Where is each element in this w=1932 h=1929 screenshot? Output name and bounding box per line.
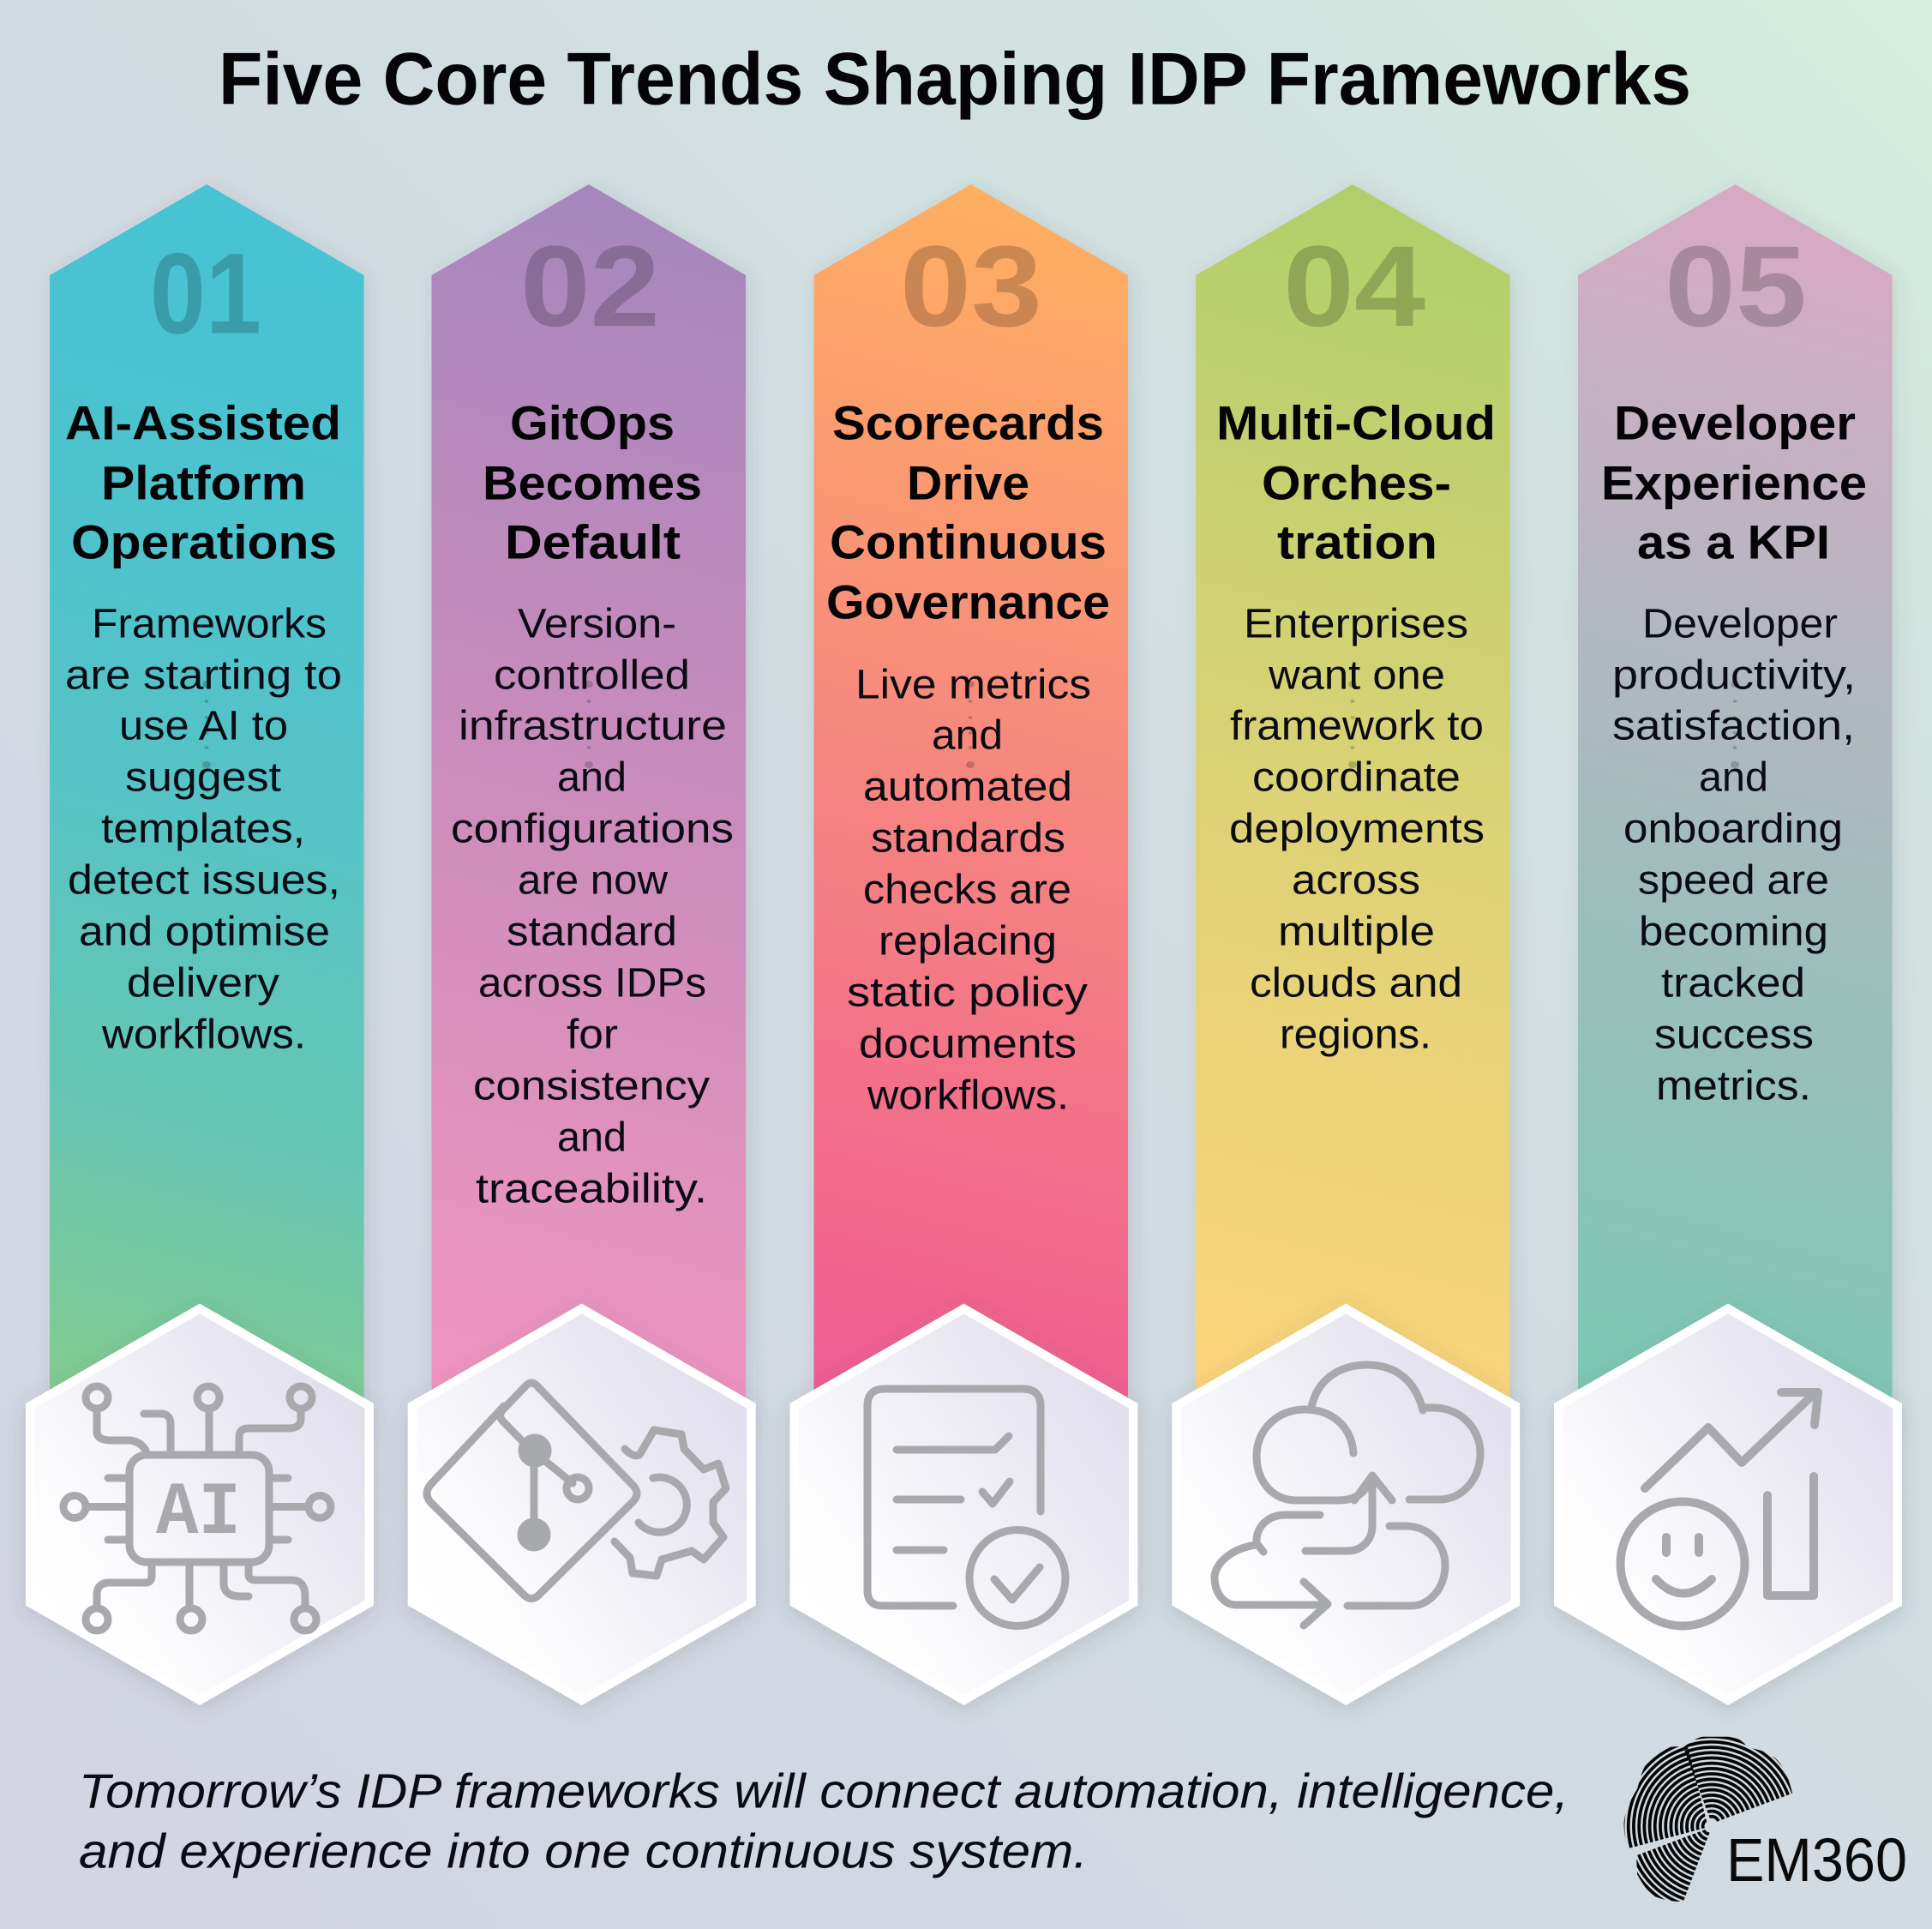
- body text 04: [1229, 602, 1485, 1058]
- body text 05: becoming: [1639, 909, 1828, 955]
- body text 05: success: [1654, 1012, 1814, 1058]
- hexagon badge 03: [790, 1303, 1138, 1705]
- icon: AI chip: AI: [156, 1472, 241, 1556]
- icon: scorecard checklist: [867, 1389, 1065, 1626]
- body text 01: delivery: [127, 960, 279, 1007]
- heading 04: tration: [1277, 514, 1437, 569]
- body text 01: Frameworks: [92, 602, 327, 646]
- column shape 04: [1196, 184, 1510, 1432]
- connector dots 03: [966, 681, 975, 768]
- body text 01: and optimise: [79, 909, 330, 955]
- body text 05: [1612, 602, 1856, 1109]
- connector dots 05: [1731, 681, 1739, 768]
- panel: 01 AI-Assisted Platform Operations: [50, 184, 363, 1432]
- body text 01: suggest: [125, 754, 281, 801]
- heading 02: Default: [505, 514, 681, 569]
- body text 02: Version-: [518, 602, 676, 646]
- body text 05: and: [1699, 754, 1768, 801]
- body text 01: workflows.: [101, 1012, 306, 1058]
- body text 04: deployments: [1229, 806, 1485, 852]
- body text 03: static policy: [847, 971, 1088, 1015]
- column shape 01: [50, 184, 363, 1432]
- body text 02: infrastructure: [459, 703, 727, 749]
- body text 04: framework to: [1230, 703, 1484, 749]
- heading 02: GitOps: [510, 396, 675, 449]
- heading 03: Scorecards: [832, 396, 1104, 449]
- heading 03: Continuous: [830, 514, 1107, 569]
- body text 01: are starting to: [65, 653, 342, 698]
- heading 05: Developer: [1614, 396, 1856, 449]
- heading 03: [826, 396, 1110, 629]
- body text 04: clouds and: [1250, 960, 1462, 1007]
- body text 02: standard: [507, 909, 677, 955]
- body text 03: [847, 662, 1091, 1118]
- heading 05: Experience: [1601, 456, 1867, 509]
- number 05: 05: [1665, 223, 1807, 351]
- body text 01: [65, 602, 342, 1058]
- body text 03: and: [932, 713, 1003, 758]
- body text 05: onboarding: [1623, 806, 1843, 852]
- body text 04: regions.: [1280, 1012, 1431, 1058]
- body text 03: replacing: [879, 919, 1057, 964]
- panel: 05 Developer Experience as a KPI: [1578, 184, 1893, 1432]
- body text 05: speed are: [1638, 857, 1829, 904]
- heading 04: Multi-Cloud: [1216, 396, 1496, 449]
- body text 03: checks are: [863, 868, 1071, 912]
- body text 01: use AI to: [119, 703, 288, 749]
- hexagon badge 04: [1172, 1303, 1520, 1705]
- body text 04: Enterprises: [1244, 602, 1468, 646]
- logo wordmark: EM360: [1726, 1827, 1907, 1895]
- heading 02: [483, 396, 702, 569]
- logo: EM360: [1623, 1737, 1905, 1902]
- body text 02: and: [557, 754, 627, 801]
- hexagon badge 05: [1554, 1303, 1902, 1705]
- column shape 02: [432, 184, 746, 1432]
- body text 02: and: [557, 1115, 627, 1161]
- body text 05: metrics.: [1656, 1063, 1811, 1109]
- icon: multi-cloud arrows: [1215, 1365, 1480, 1626]
- heading 04: [1216, 396, 1496, 569]
- heading 01: AI-Assisted: [65, 396, 341, 449]
- body text 02: across IDPs: [478, 960, 706, 1007]
- body text 03: documents: [859, 1022, 1077, 1067]
- body text 02: [451, 602, 734, 1212]
- title: Five Core Trends Shaping IDP Frameworks: [219, 38, 1691, 120]
- body text 03: Live metrics: [855, 662, 1091, 708]
- number 04: 04: [1283, 223, 1425, 351]
- panel: 03 Scorecards Drive Continuous Governance: [814, 184, 1128, 1432]
- icon: smiley with growth chart: [1620, 1392, 1818, 1626]
- body text 04: multiple: [1278, 909, 1435, 955]
- heading 04: Orches-: [1262, 456, 1451, 509]
- column shape 05: [1578, 184, 1893, 1432]
- connector dots 04: [1348, 681, 1357, 768]
- body text 02: are now: [518, 857, 668, 904]
- closing statement: and experience into one continuous system.: [79, 1824, 1088, 1879]
- closing statement: [79, 1764, 1569, 1879]
- closing statement: Tomorrow’s IDP frameworks will connect automation, intelligence,: [79, 1764, 1569, 1819]
- hexagon badge 02: [408, 1303, 756, 1705]
- column shape 03: [814, 184, 1128, 1432]
- body text 03: workflows.: [867, 1073, 1069, 1118]
- icon: AI chip: [63, 1386, 331, 1631]
- panel: 02 GitOps Becomes Default: [432, 184, 746, 1432]
- connector dots 01: [202, 681, 211, 768]
- hexagon badge 01: [26, 1303, 374, 1705]
- body text 02: traceability.: [476, 1166, 707, 1212]
- heading 01: [65, 396, 341, 569]
- heading 01: Operations: [71, 514, 337, 569]
- body text 01: templates,: [101, 806, 305, 852]
- body text 05: tracked: [1661, 960, 1805, 1007]
- number 03: 03: [900, 223, 1042, 351]
- body text 03: automated: [863, 765, 1072, 809]
- number 01: 01: [150, 230, 261, 358]
- logo mark: swirl: [1623, 1737, 1793, 1902]
- heading 03: Governance: [826, 574, 1110, 629]
- heading 02: Becomes: [483, 456, 702, 509]
- body text 04: across: [1292, 857, 1420, 904]
- body text 05: satisfaction,: [1612, 703, 1855, 749]
- body text 02: for: [567, 1012, 618, 1058]
- body text 02: consistency: [473, 1063, 710, 1109]
- icon: git branch and gear: [427, 1383, 726, 1598]
- body text 01: detect issues,: [68, 857, 340, 904]
- body text 05: productivity,: [1612, 653, 1856, 698]
- body text 04: coordinate: [1252, 754, 1461, 801]
- body text 05: Developer: [1642, 602, 1838, 646]
- body text 03: standards: [871, 816, 1065, 861]
- heading 03: Drive: [907, 456, 1029, 509]
- heading 05: as a KPI: [1637, 514, 1830, 569]
- body text 04: want one: [1268, 653, 1445, 698]
- number 02: 02: [520, 223, 660, 351]
- heading 05: [1601, 396, 1867, 569]
- connector dots 02: [585, 681, 593, 768]
- panel: 04 Multi-Cloud Orchestration: [1196, 184, 1510, 1432]
- heading 01: Platform: [101, 456, 306, 509]
- body text 02: controlled: [494, 653, 690, 698]
- body text 02: configurations: [451, 806, 734, 852]
